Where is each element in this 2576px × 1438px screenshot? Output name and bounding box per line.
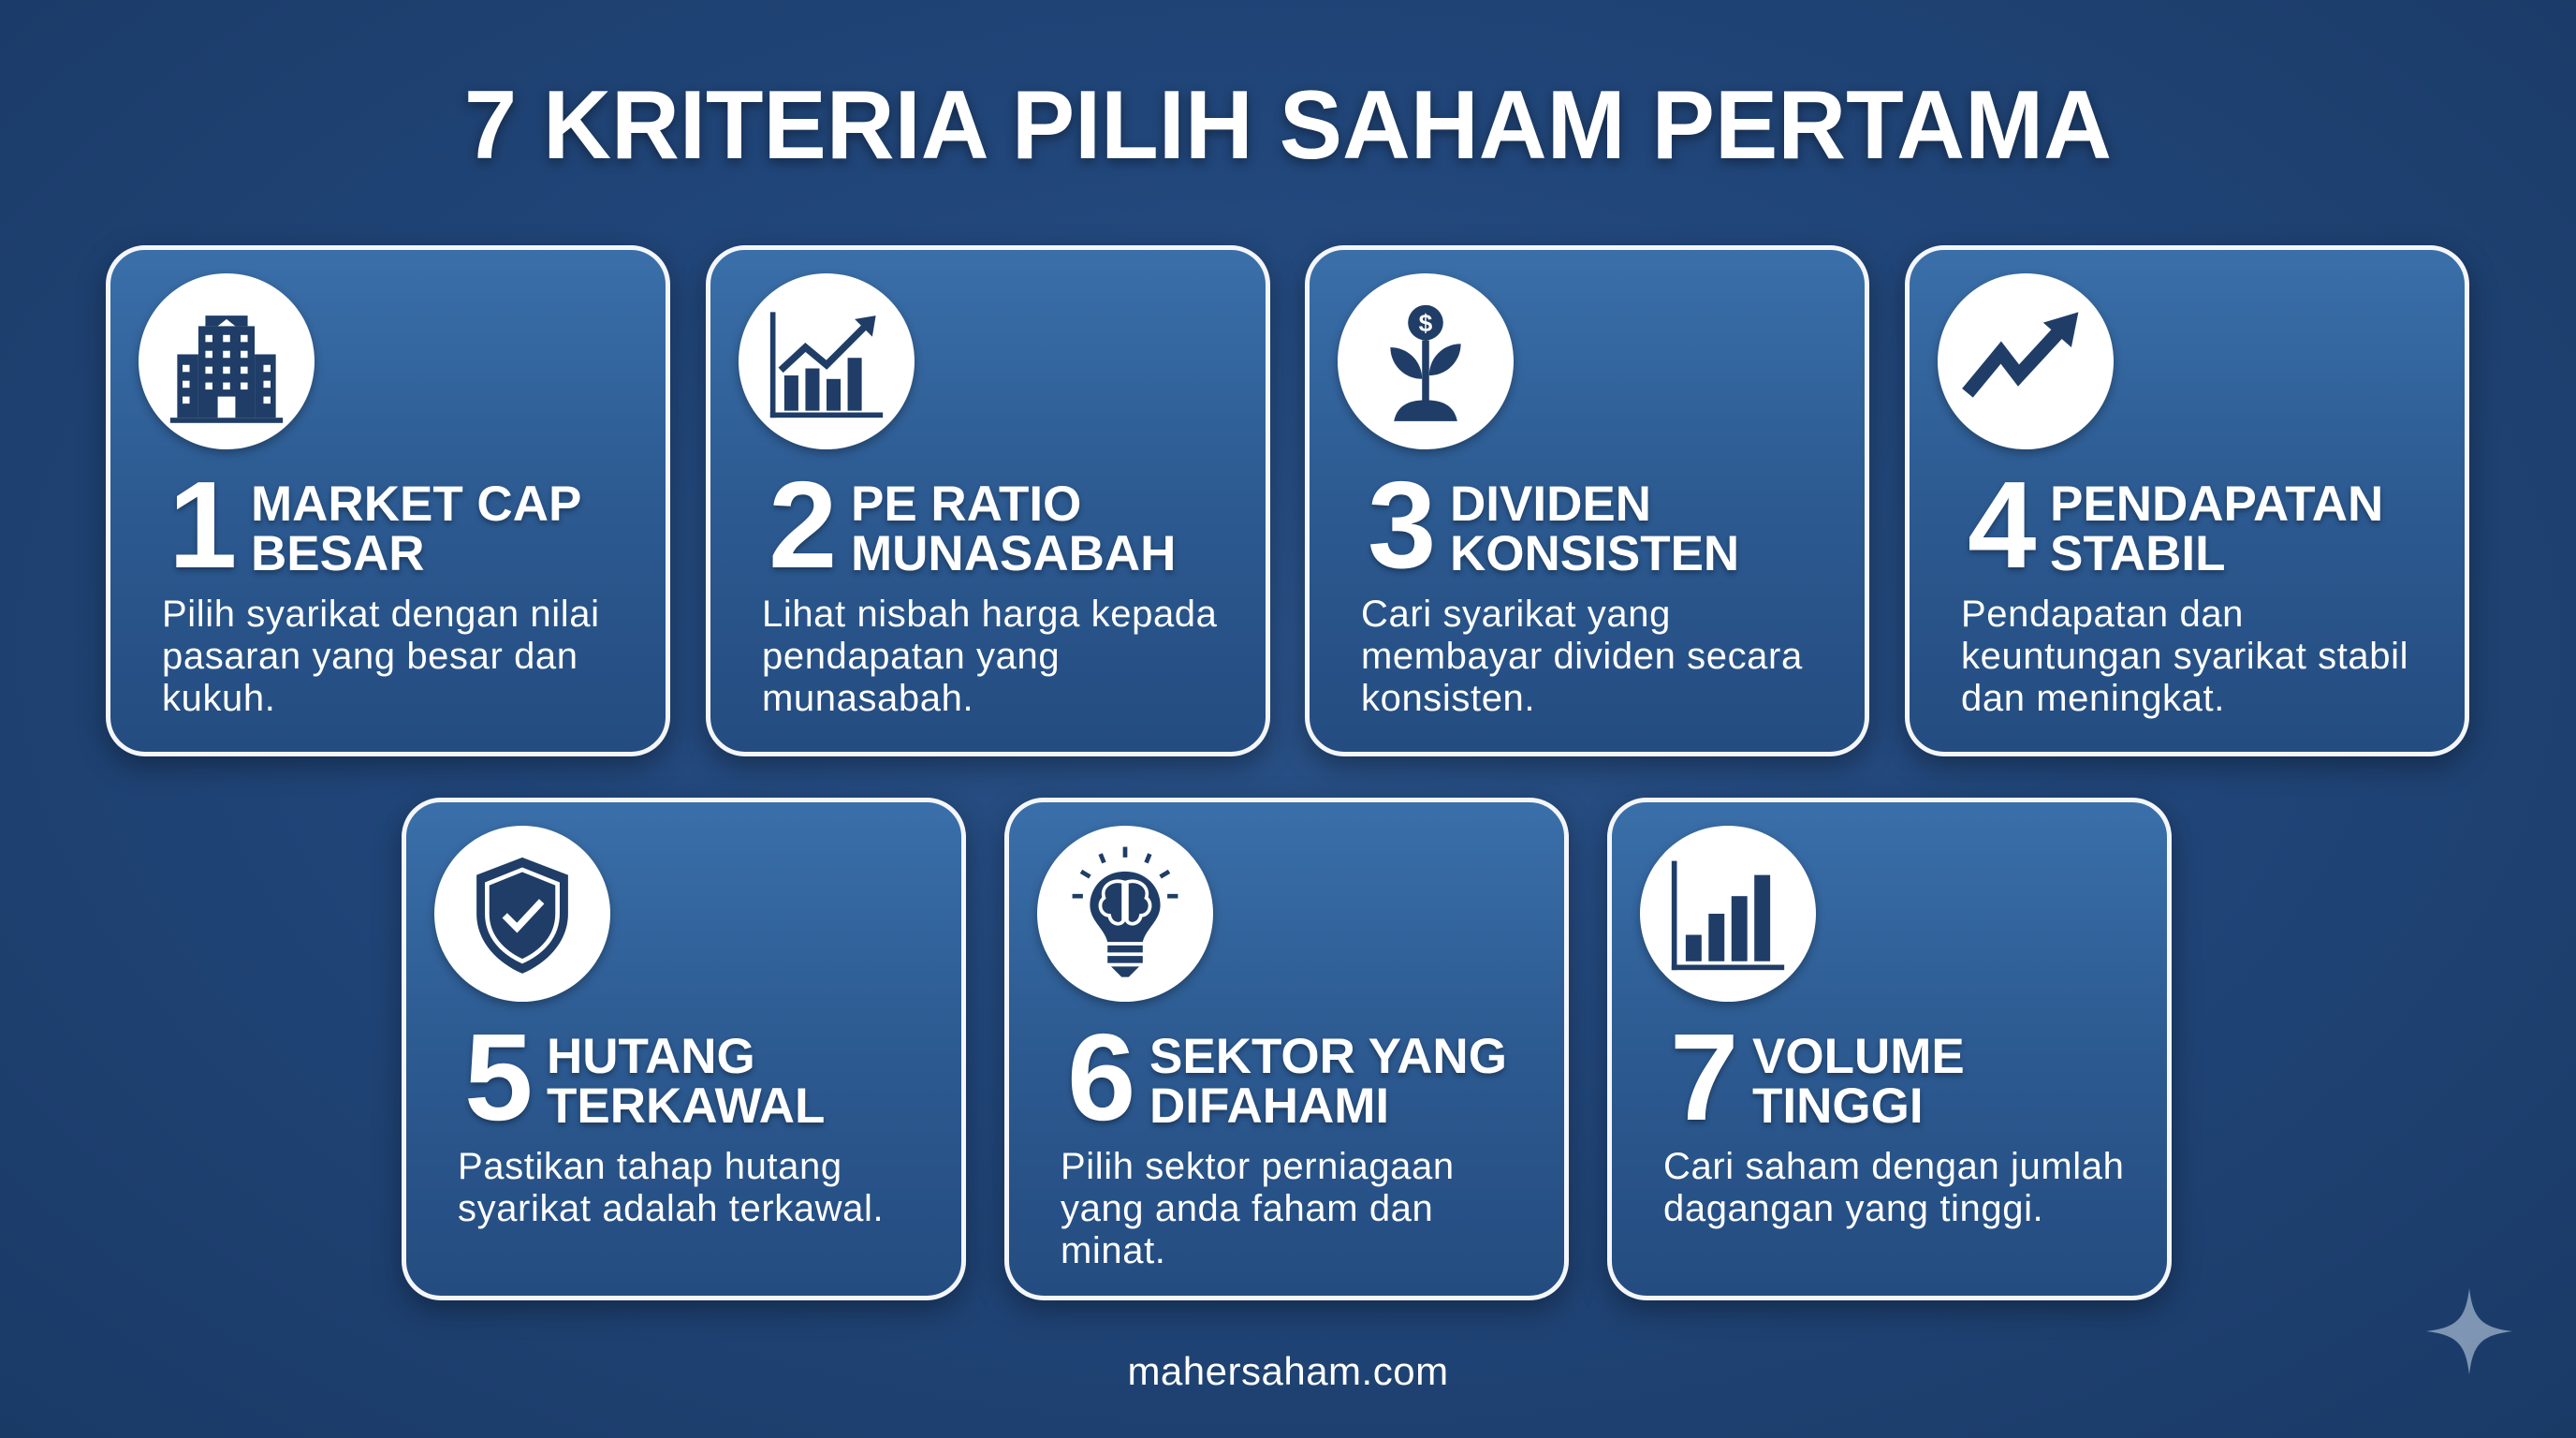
heading: MARKET CAP [251,477,581,532]
footer: website: mahersaham.com [1127,1349,1449,1393]
icon: shield check [434,826,610,1002]
text: pendapatan yang [762,636,1060,677]
icon: trend arrow [1938,273,2114,449]
text: membayar dividen secara [1361,636,1803,677]
panel: 3 dividen [1305,245,1869,756]
text: pasaran yang besar dan [162,636,578,677]
title: 7 KRITERIA PILIH SAHAM PERTAMA [464,71,2112,180]
number: 7 [1670,1008,1738,1146]
text: Pilih sektor perniagaan [1061,1146,1455,1187]
text: munasabah. [762,678,973,719]
heading [545,1029,826,1134]
panel: 5 hutang [402,798,966,1300]
text [1361,594,1803,719]
heading: KONSISTEN [1450,526,1739,581]
heading [1149,1029,1507,1134]
panel: 4 pendapatan [1905,245,2469,756]
icon: bar chart up [739,273,915,449]
text: Pendapatan dan [1961,594,2244,635]
heading: HUTANG [547,1029,755,1084]
heading [1750,1029,1965,1134]
heading: STABIL [2050,526,2225,581]
heading [251,477,582,581]
text: Cari syarikat yang [1361,594,1671,635]
text [162,594,600,719]
icon: money plant [1338,273,1514,449]
icon: volume bars [1640,826,1816,1002]
text: minat. [1061,1230,1166,1271]
icon: building [139,273,315,449]
text: Pilih syarikat dengan nilai [162,594,600,635]
text: Lihat nisbah harga kepada [762,594,1217,635]
text: kukuh. [162,678,275,719]
text: Cari saham dengan jumlah [1663,1146,2124,1187]
heading: SEKTOR YANG [1149,1029,1507,1084]
heading: PENDAPATAN [2050,477,2383,532]
heading: TERKAWAL [547,1078,825,1134]
icon: sparkle [2426,1288,2512,1374]
panel: 6 sektor [1004,798,1569,1300]
heading: DIVIDEN [1450,477,1651,532]
number: 6 [1067,1008,1135,1146]
heading [1450,477,1739,581]
number: 2 [768,456,837,594]
heading: BESAR [251,526,425,581]
number: 1 [168,456,237,594]
heading: TINGGI [1752,1078,1924,1134]
heading [2050,477,2383,581]
text: dan meningkat. [1961,678,2225,719]
text [458,1146,884,1229]
text: yang anda faham dan [1061,1188,1433,1229]
text [1061,1146,1455,1271]
heading: VOLUME [1752,1029,1965,1084]
panel: 7 volume [1607,798,2172,1300]
number: 4 [1968,456,2036,594]
heading: MUNASABAH [851,526,1176,581]
panel: 2 pe ratio [706,245,1270,756]
text [762,594,1217,719]
text [1663,1146,2124,1229]
text: dagangan yang tinggi. [1663,1188,2043,1229]
number: 3 [1368,456,1436,594]
text [1961,594,2408,719]
icon: money plant: $ [1419,309,1433,337]
text: syarikat adalah terkawal. [458,1188,884,1229]
heading: DIFAHAMI [1149,1078,1389,1134]
icon: lightbulb brain [1037,826,1213,1002]
text: Pastikan tahap hutang [458,1146,842,1187]
heading: PE RATIO [851,477,1081,532]
text: keuntungan syarikat stabil [1961,636,2408,677]
heading [851,477,1176,581]
text: konsisten. [1361,678,1535,719]
number: 5 [464,1008,533,1146]
panel: 1 market cap [106,245,670,756]
